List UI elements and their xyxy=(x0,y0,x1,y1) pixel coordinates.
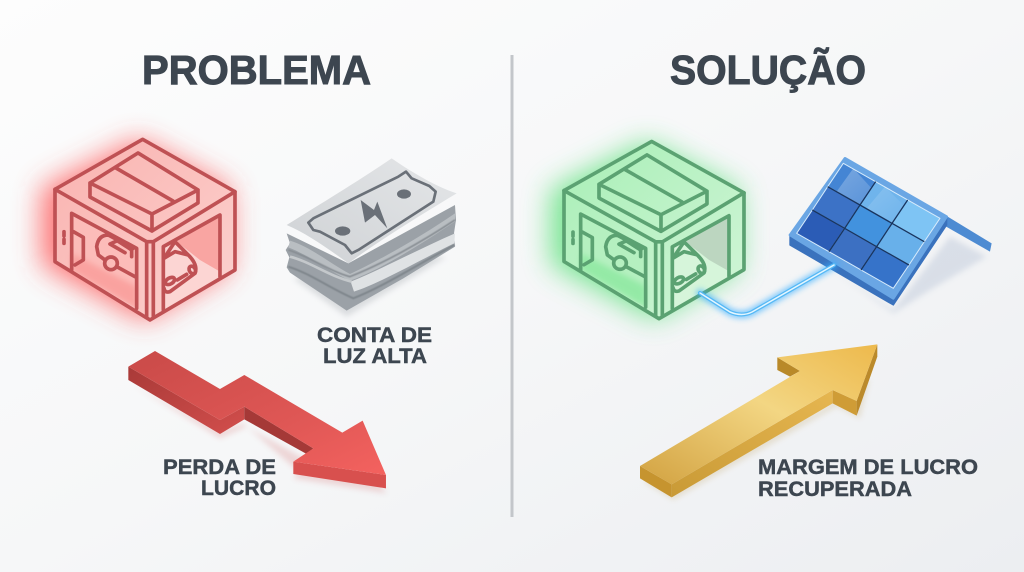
label: margem de lucro recuperada: MARGEM DE LUCRO xyxy=(758,456,978,479)
label: margem de lucro recuperada xyxy=(758,456,978,501)
cable: garage to solar panel xyxy=(700,265,834,314)
label: conta de luz alta xyxy=(317,324,432,368)
label: margem de lucro recuperada: RECUPERADA xyxy=(758,478,912,501)
icon: solar panel xyxy=(790,158,992,313)
arrow: red falling xyxy=(128,351,387,493)
top bill xyxy=(287,158,457,263)
divider xyxy=(510,55,514,517)
label: perda de lucro: PERDA DE xyxy=(163,456,276,479)
solar cells xyxy=(797,163,940,288)
label: conta de luz alta: CONTA DE xyxy=(317,324,432,347)
title: solução: SOLUÇÃO xyxy=(670,47,866,93)
arrow: gold rising xyxy=(640,344,877,500)
panel frame xyxy=(790,217,947,305)
label: conta de luz alta: LUZ ALTA xyxy=(323,345,427,368)
label: perda de lucro xyxy=(163,456,276,500)
bill layers xyxy=(286,205,456,311)
title: problema: PROBLEMA xyxy=(142,47,371,93)
label: perda de lucro: LUCRO xyxy=(201,477,276,500)
icon: red garage xyxy=(47,139,235,320)
roof unit xyxy=(599,155,707,231)
icon: electricity bill stack xyxy=(286,158,457,317)
panel support xyxy=(943,216,992,252)
roof unit xyxy=(90,153,198,231)
icon: green garage xyxy=(556,141,744,319)
